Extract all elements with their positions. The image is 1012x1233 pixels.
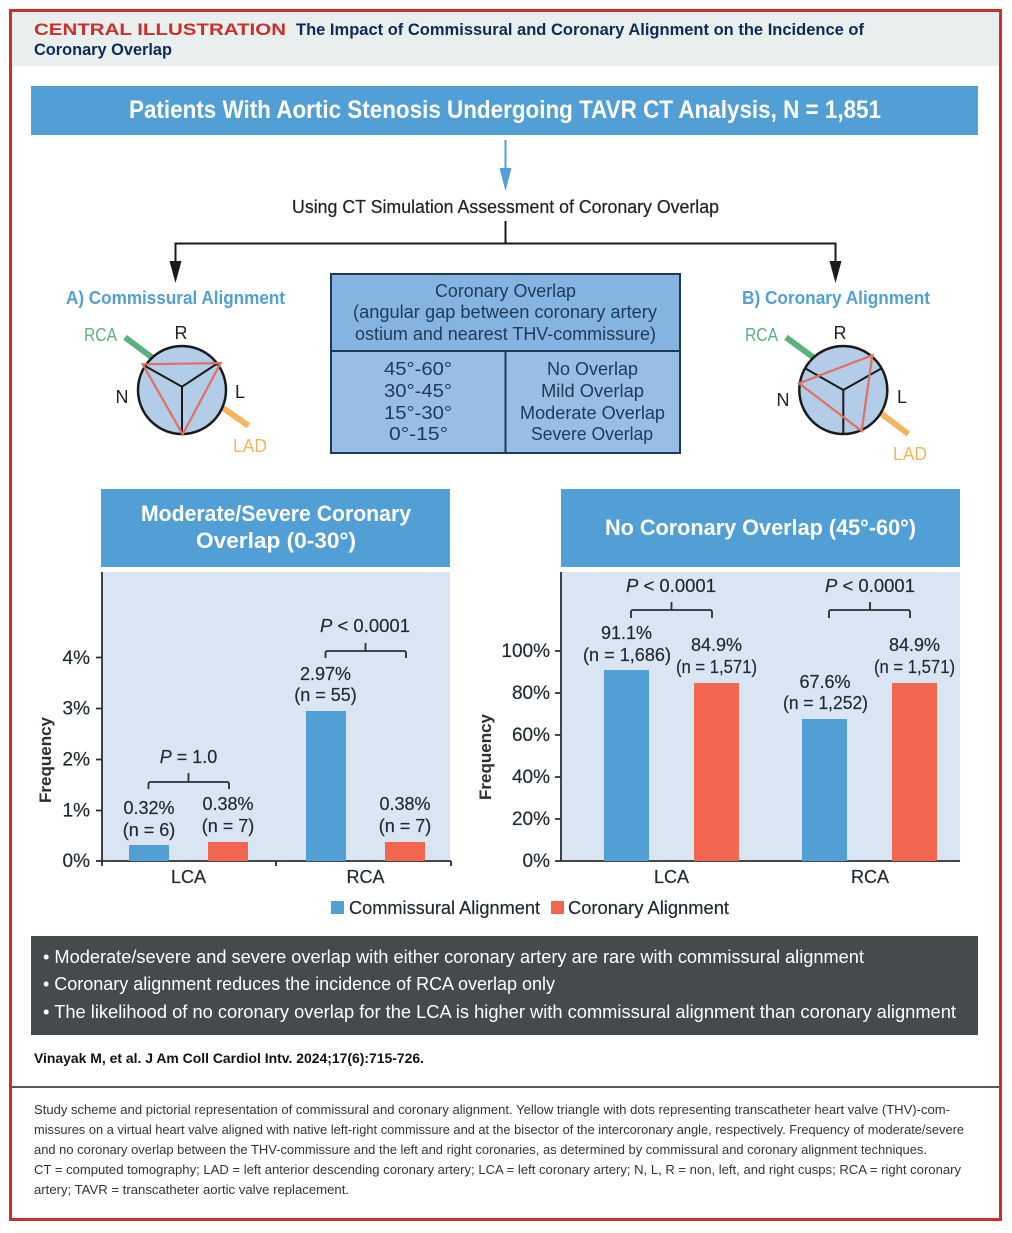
valve diagram A (125, 337, 248, 434)
chart heading: no overlap: No Coronary Overlap (45°-60°) (605, 515, 916, 540)
bar values: (n = 1,571) (676, 657, 757, 677)
bar values: 84.9% (691, 635, 742, 655)
p values: P < 0.0001 (825, 576, 915, 596)
x axis labels (171, 867, 385, 887)
y axis and ticks (96, 572, 451, 866)
chart heading: moderate/severe overlap: Moderate/Severe Coronary (141, 501, 412, 526)
y axis labels (63, 648, 90, 872)
title: The Impact of Commissural and Coronary Alignment on the Incidence of (296, 20, 864, 39)
table overlap grades: Moderate Overlap (520, 403, 665, 423)
bar values (123, 664, 431, 840)
conclusions box: • The likelihood of no coronary overlap for the LCA is higher with commissural alignment than coronary alignment (43, 1002, 956, 1022)
caption: and no coronary overlap between the THV-commissure and the left and right coronaries, as determined by commissural and coronary alignment techniques. (34, 1143, 927, 1157)
bar values: (n = 6) (123, 820, 175, 840)
valve diagram B (786, 337, 908, 434)
central illustration label: CENTRAL ILLUSTRATION (34, 20, 286, 39)
y axis labels: 4% (63, 648, 90, 669)
x axis labels: LCA (654, 867, 689, 887)
CT simulation text: Using CT Simulation Assessment of Coronary Overlap (292, 197, 719, 217)
y axis labels: 100% (501, 641, 550, 662)
table overlap grades: No Overlap (547, 359, 638, 379)
table angle ranges: 0°-15° (389, 424, 448, 444)
conclusions box: • Coronary alignment reduces the incidence of RCA overlap only (43, 974, 555, 994)
caption: Study scheme and pictorial representation of commissural and coronary alignment. Yellow triangle with dots representing transcatheter heart valve (THV)-com- (34, 1103, 950, 1117)
table heading: Coronary Overlap (435, 281, 576, 301)
bars (604, 670, 937, 861)
title: Coronary Overlap (34, 40, 172, 59)
labels B: RCA (745, 325, 778, 345)
panel: A commissural alignment (66, 288, 285, 456)
p values (160, 616, 410, 767)
significance brackets (631, 602, 910, 618)
bar values: (n = 7) (202, 816, 254, 836)
p values: P = 1.0 (160, 747, 217, 767)
labels B: R (834, 323, 846, 343)
bar values: 2.97% (300, 664, 351, 684)
chart heading: no overlap (561, 489, 960, 567)
bar values: 67.6% (799, 672, 851, 692)
bar values: 0.32% (123, 798, 175, 818)
population banner (31, 86, 978, 135)
bar values: 0.38% (379, 794, 431, 814)
table overlap grades (520, 359, 665, 444)
title (34, 20, 864, 59)
bar values: (n = 55) (294, 685, 357, 705)
y axis labels: 2% (63, 750, 90, 770)
labels B (745, 323, 927, 464)
heading B: B) Coronary Alignment (742, 288, 930, 308)
y axis labels: 3% (63, 698, 90, 720)
p values: P < 0.0001 (626, 576, 716, 596)
bar chart: no overlap (476, 572, 960, 887)
bar values: 84.9% (889, 635, 940, 655)
panel: coronary overlap table (331, 274, 680, 453)
bar values: (n = 1,686) (583, 645, 671, 665)
panel: B coronary alignment (742, 288, 930, 464)
bar values: (n = 7) (379, 816, 431, 836)
caption: missures on a virtual heart valve aligned with native left-right commissure and at the bisector of the intercoronary angle, respectively. Frequency of moderate/severe (34, 1123, 964, 1137)
labels A: R (174, 323, 188, 343)
citation: Vinayak M, et al. J Am Coll Cardiol Intv. 2024;17(6):715-726. (34, 1050, 424, 1066)
table angle ranges: 45°-60° (384, 359, 452, 379)
labels A (84, 323, 267, 456)
bar values: 91.1% (601, 623, 652, 643)
bars (129, 711, 425, 861)
conclusions box: • Moderate/severe and severe overlap with either coronary artery are rare with commissural alignment (43, 947, 864, 967)
y axis title: Frequency (36, 716, 55, 803)
chart heading: moderate/severe overlap (101, 489, 450, 567)
labels A: LAD (233, 436, 267, 456)
table angle ranges (384, 359, 452, 444)
table heading (353, 281, 657, 344)
y axis labels: 1% (63, 800, 90, 822)
caption: CT = computed tomography; LAD = left anterior descending coronary artery; LCA = left coronary artery; N, L, R = non, left, and right cusps; RCA = right coronary (34, 1163, 962, 1177)
header band (12, 12, 999, 66)
branching arrows (170, 221, 842, 283)
bar values (583, 623, 955, 713)
labels A: RCA (84, 325, 117, 345)
x axis labels: RCA (851, 867, 889, 887)
labels B: L (897, 387, 907, 407)
labels B: LAD (893, 444, 927, 464)
legend (331, 898, 729, 918)
x axis labels: LCA (171, 867, 206, 887)
legend: Commissural Alignment (349, 898, 540, 918)
p values: P < 0.0001 (320, 616, 410, 636)
x axis labels: RCA (346, 867, 385, 887)
y axis labels: 0% (63, 851, 90, 872)
table overlap grades: Severe Overlap (531, 424, 653, 444)
labels B: N (776, 390, 790, 410)
arrow: banner to CT simulation (500, 140, 512, 191)
labels A: N (116, 387, 128, 407)
table angle ranges: 15°-30° (384, 403, 452, 423)
caption (34, 1103, 964, 1197)
y axis labels: 0% (523, 851, 550, 872)
bar values: (n = 1,252) (783, 693, 868, 713)
table angle ranges: 30°-45° (384, 381, 452, 401)
y axis labels: 40% (512, 767, 550, 788)
conclusions box (31, 936, 978, 1035)
p values (626, 576, 915, 596)
bar chart: moderate/severe overlap (36, 572, 451, 887)
y axis title: Frequency (476, 713, 495, 800)
heading A: A) Commissural Alignment (66, 288, 285, 308)
y axis labels: 20% (512, 809, 550, 830)
y axis labels: 60% (512, 725, 550, 746)
table overlap grades: Mild Overlap (541, 381, 644, 401)
y axis labels (501, 641, 550, 872)
table heading: ostium and nearest THV-commissure) (355, 324, 656, 344)
x axis labels (654, 867, 889, 887)
significance brackets (148, 643, 406, 789)
y axis labels: 80% (512, 683, 550, 704)
population banner: Patients With Aortic Stenosis Undergoing TAVR CT Analysis, N = 1,851 (129, 96, 881, 124)
y axis and ticks (555, 572, 960, 861)
chart heading: moderate/severe overlap: Overlap (0-30°) (196, 528, 356, 553)
bar values: (n = 1,571) (874, 657, 955, 677)
caption: artery; TAVR = transcatheter aortic valve replacement. (34, 1183, 349, 1197)
table heading: (angular gap between coronary artery (353, 302, 657, 322)
labels A: L (235, 382, 245, 402)
legend: Coronary Alignment (568, 898, 729, 918)
bar values: 0.38% (202, 794, 254, 814)
